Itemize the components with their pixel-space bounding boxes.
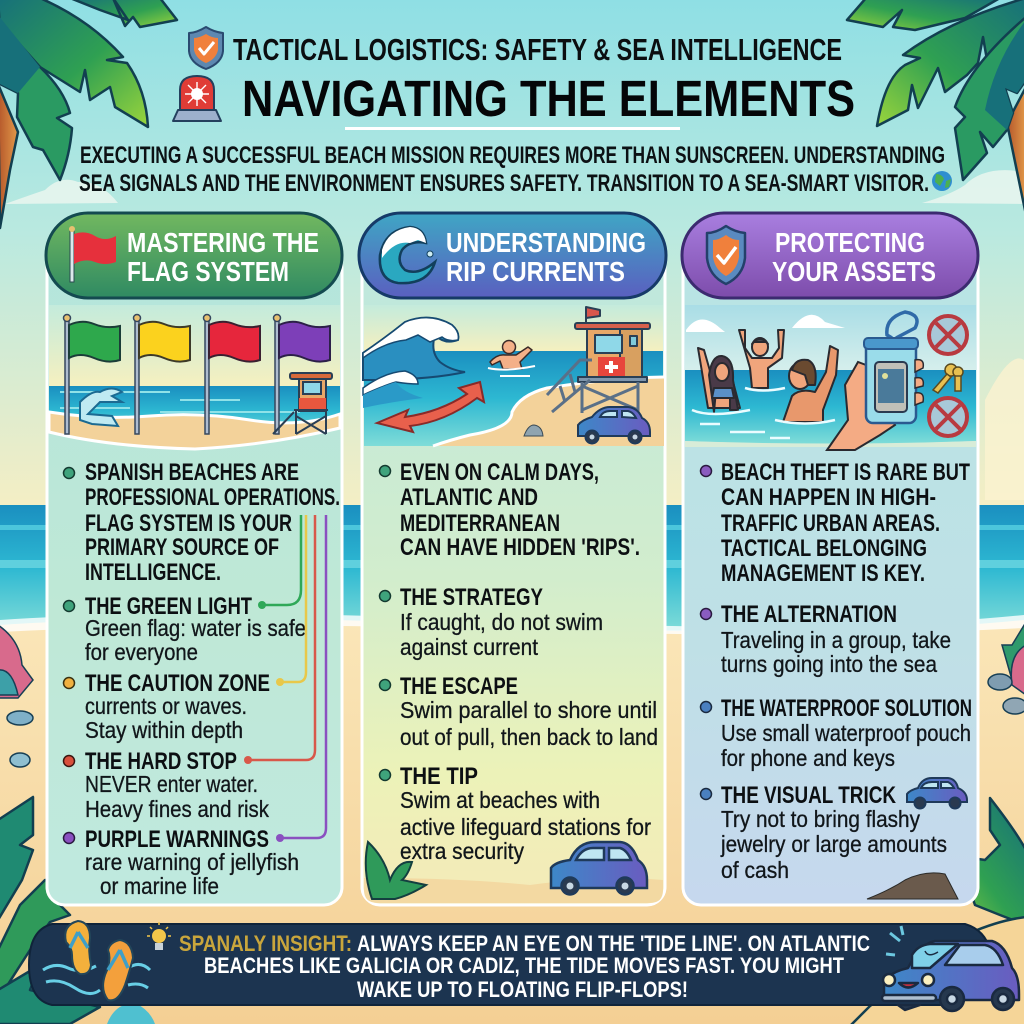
main title: NAVIGATING THE ELEMENTS xyxy=(242,70,855,127)
flag text block: PURPLE WARNINGS xyxy=(85,826,269,853)
bullet: intro xyxy=(700,466,712,476)
icon: shield xyxy=(707,226,745,284)
rip text block: Swim at beaches with xyxy=(400,787,600,813)
palm tree top right xyxy=(847,0,1024,215)
rip text block: EVEN ON CALM DAYS, xyxy=(400,459,599,486)
flag text block: PROFESSIONAL OPERATIONS. xyxy=(85,484,340,511)
icon: light bulb xyxy=(147,922,171,950)
spark lines xyxy=(886,926,903,955)
rip arrows xyxy=(377,382,484,432)
insight text xyxy=(179,931,870,1002)
header pill: flag system: MASTERING THE xyxy=(127,227,319,258)
icon: globe xyxy=(932,171,952,191)
rip text block: ATLANTIC AND xyxy=(400,484,538,511)
flag text block: Heavy fines and risk xyxy=(85,796,269,822)
assets text block: THE ALTERNATION xyxy=(721,601,897,628)
bullet: intro xyxy=(64,468,74,478)
flag text block: Stay within depth xyxy=(85,717,243,743)
icon: keys xyxy=(933,364,963,393)
flag text block: for everyone xyxy=(85,639,198,665)
rip text block: If caught, do not swim xyxy=(400,609,603,635)
rip text block xyxy=(380,459,658,864)
title line 1: TACTICAL LOGISTICS: SAFETY & SEA INTELLIGENCE xyxy=(233,32,842,67)
icon: wave xyxy=(380,227,435,283)
bottom sand with plant and car xyxy=(364,842,663,903)
bullet: waterproof solution xyxy=(700,702,712,712)
bullet: visual trick xyxy=(700,788,712,800)
icon: shield xyxy=(189,27,223,69)
rip current beach scene xyxy=(363,305,664,446)
bullet: tip xyxy=(380,770,390,780)
header pill: assets: PROTECTING xyxy=(775,227,925,258)
rip text block: THE STRATEGY xyxy=(400,584,543,611)
assets text block: for phone and keys xyxy=(721,745,895,771)
rip text block: active lifeguard stations for xyxy=(400,814,651,840)
panel: rip currents xyxy=(362,250,665,905)
assets text block: turns going into the sea xyxy=(721,651,937,677)
rip text block: THE TIP xyxy=(400,763,478,790)
panel: flag system xyxy=(47,250,342,905)
panel: protecting assets xyxy=(683,250,978,905)
flag text block: rare warning of jellyfish xyxy=(85,849,299,875)
hand with pouch xyxy=(827,362,895,450)
insight text: BEACHES LIKE GALICIA OR CADIZ, THE TIDE MOVES FAST. YOU MIGHT xyxy=(204,953,844,978)
insight text: ALWAYS KEEP AN EYE ON THE 'TIDE LINE'. ON ATLANTIC xyxy=(357,931,870,956)
palm leaves bottom left xyxy=(0,797,100,1024)
intro paragraph xyxy=(79,142,945,197)
flag text block: Green flag: water is safe xyxy=(85,615,306,641)
assets beach scene xyxy=(685,305,976,450)
assets text block: TACTICAL BELONGING xyxy=(721,535,927,562)
rip text block: CAN HAVE HIDDEN 'RIPS'. xyxy=(400,534,640,561)
rock xyxy=(524,425,543,436)
assets text block: Use small waterproof pouch xyxy=(721,720,971,746)
flag text block: INTELLIGENCE. xyxy=(85,559,221,586)
flag text block xyxy=(64,459,340,899)
assets text block: TRAFFIC URBAN AREAS. xyxy=(721,510,940,537)
rip text block: out of pull, then back to land xyxy=(400,724,658,750)
icon: smiling car xyxy=(882,941,1019,1011)
rip text block: THE ESCAPE xyxy=(400,673,518,700)
assets text block: of cash xyxy=(721,857,789,883)
header pill: rip currents: RIP CURRENTS xyxy=(446,256,625,287)
flag beach scene xyxy=(49,305,340,449)
bullet: caution zone xyxy=(64,678,74,688)
flag connector lines xyxy=(244,515,326,842)
assets text block: Try not to bring flashy xyxy=(721,806,920,832)
flag text block: NEVER enter water. xyxy=(85,771,258,797)
header pill: flag system: FLAG SYSTEM xyxy=(127,256,289,287)
insight text: WAKE UP TO FLOATING FLIP-FLOPS! xyxy=(357,977,688,1002)
yellow flag xyxy=(139,322,190,362)
flag text block: FLAG SYSTEM IS YOUR xyxy=(85,510,292,537)
assets text block: MANAGEMENT IS KEY. xyxy=(721,560,925,587)
woman xyxy=(698,348,740,408)
flag text block: THE CAUTION ZONE xyxy=(85,670,270,697)
insight text: SPANALY INSIGHT: xyxy=(179,931,352,956)
big wave xyxy=(363,318,465,380)
green flag xyxy=(69,322,120,362)
bullet: alternation xyxy=(700,608,712,620)
title underline xyxy=(345,127,680,130)
flag text block: PRIMARY SOURCE OF xyxy=(85,534,279,561)
flag text block: or marine life xyxy=(100,873,219,899)
rock xyxy=(867,873,958,899)
lifeguard tower xyxy=(273,373,332,434)
assets text block: CAN HAPPEN IN HIGH- xyxy=(721,484,936,511)
flag text block: THE HARD STOP xyxy=(85,748,237,775)
palm tree top left xyxy=(0,0,177,228)
coral and rocks right xyxy=(988,622,1024,714)
icon: crossed-out circle top xyxy=(929,316,967,354)
icon: small car xyxy=(907,778,967,808)
blue car xyxy=(578,407,650,444)
bullet: intro xyxy=(380,466,390,476)
header pill: rip currents: UNDERSTANDING xyxy=(446,227,646,258)
rip text block: MEDITERRANEAN xyxy=(400,510,560,537)
purple flag xyxy=(279,322,330,362)
assets text block xyxy=(700,459,972,883)
bullet: strategy xyxy=(380,590,390,602)
bullet: escape xyxy=(380,680,390,690)
assets text block: Traveling in a group, take xyxy=(721,627,951,653)
red flag xyxy=(209,322,260,362)
palm leaves bottom right and dune xyxy=(850,798,1024,1024)
bullet: purple warnings xyxy=(64,832,74,844)
icon: crossed-out circle bottom xyxy=(929,398,967,436)
callout: insight bar xyxy=(29,921,1019,1011)
swimmers xyxy=(698,330,838,422)
rip text block: against current xyxy=(400,634,539,660)
bullet: green light xyxy=(64,600,74,612)
lifeguard tower xyxy=(547,307,650,413)
assets text block: THE VISUAL TRICK xyxy=(721,782,897,809)
flag text block: currents or waves. xyxy=(85,693,247,719)
flag text block: THE GREEN LIGHT xyxy=(85,593,252,620)
header pill: assets xyxy=(682,213,978,298)
bullet: hard stop xyxy=(64,756,74,766)
swimmer xyxy=(490,340,532,369)
icon: red flag xyxy=(69,226,116,282)
flag text block: SPANISH BEACHES ARE xyxy=(85,459,299,486)
header pill: flag system xyxy=(46,213,342,298)
header pill: assets: YOUR ASSETS xyxy=(772,256,936,287)
assets text block: jewelry or large amounts xyxy=(720,831,947,857)
coral and rocks left xyxy=(0,625,33,767)
icon: flip-flops xyxy=(43,921,150,1000)
rip text block: extra security xyxy=(400,838,524,864)
rip text block: Swim parallel to shore until xyxy=(400,697,657,723)
right man xyxy=(783,346,838,422)
header pill: rip currents xyxy=(359,213,666,298)
icon: siren xyxy=(173,76,221,121)
middle man xyxy=(739,330,784,388)
